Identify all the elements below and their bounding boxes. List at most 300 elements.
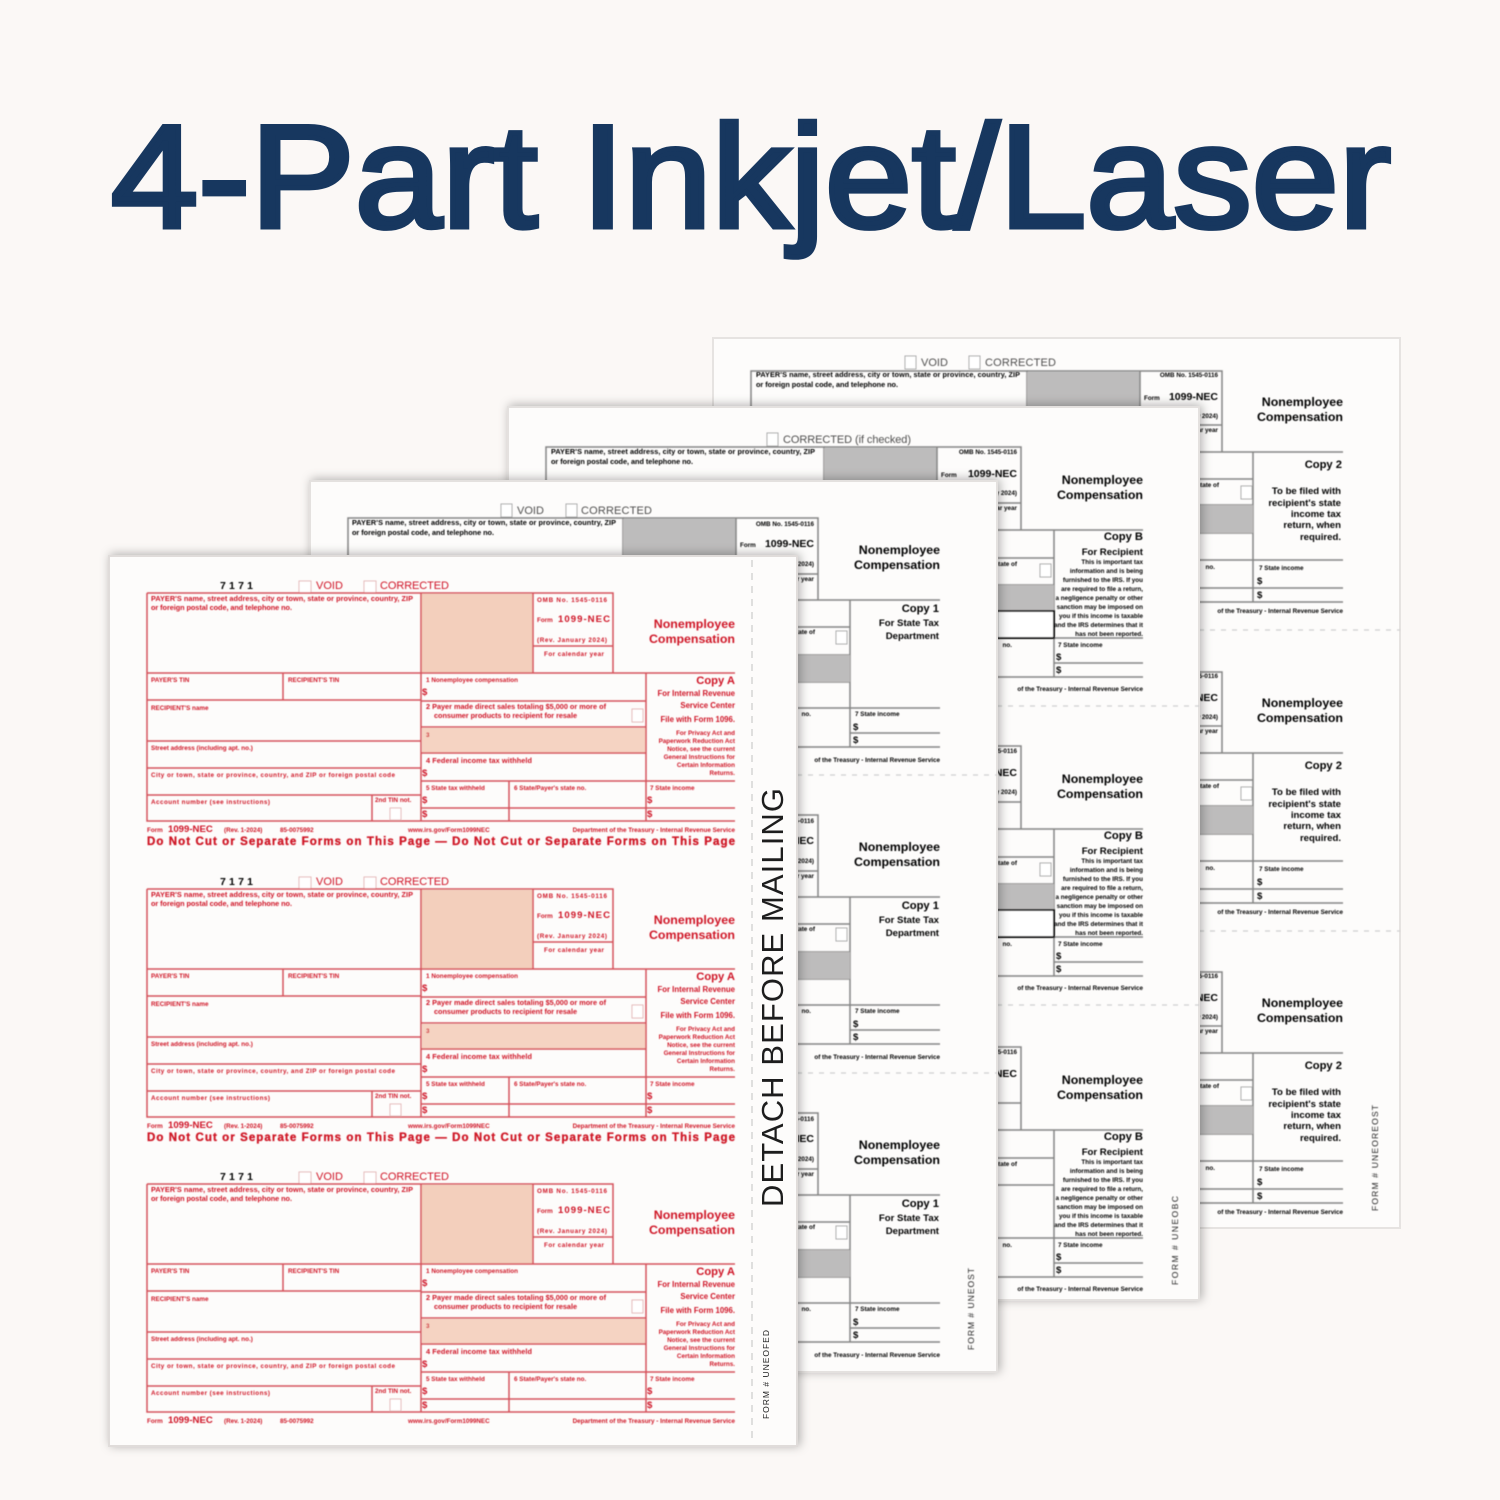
- red form 1: Notice, see the current: [667, 746, 736, 753]
- form block 1: are required to file a return,: [1061, 586, 1143, 593]
- form block 2: income tax: [1291, 810, 1342, 821]
- form block 3: state of: [793, 1224, 816, 1231]
- form block 3: Copy 2: [1305, 1060, 1342, 1072]
- form block 3: state of: [1197, 1083, 1220, 1090]
- page 2: copy 1 for state tax department: [310, 481, 997, 1372]
- form block 3: no.: [1206, 1165, 1215, 1172]
- form block 2: Compensation: [1257, 711, 1343, 725]
- red form 1: Street address (including apt. no.): [151, 745, 253, 752]
- page 2 forms: [348, 504, 997, 1359]
- form block 1: furnished to the IRS. If you: [1063, 577, 1143, 584]
- red form 1: City or town, state or province, country, and ZIP or foreign postal code: [151, 772, 395, 779]
- page 3 form code: FORM # UNEOBC: [1170, 1196, 1180, 1285]
- red form 1: 6 State/Payer's state no.: [514, 785, 586, 792]
- red form 2: 2nd TIN not.: [375, 1093, 412, 1100]
- red form 1: For Internal Revenue: [657, 689, 736, 698]
- form block 1: required.: [1300, 532, 1341, 543]
- top form header: CORRECTED: [985, 357, 1056, 369]
- form block 2: Nonemployee: [1262, 696, 1343, 710]
- red form 1: $: [422, 768, 428, 779]
- top form header: [546, 433, 937, 488]
- form block 2: 1099-NEC: [765, 835, 814, 847]
- red form 1: [147, 580, 736, 848]
- red form 2: RECIPIENT'S name: [151, 1001, 209, 1008]
- form block 3: 1099-NEC: [968, 1068, 1017, 1080]
- red form 1: General Instructions for: [664, 754, 736, 761]
- form block 1: For calendar year: [964, 505, 1018, 512]
- form block 1: $: [853, 735, 859, 746]
- form block 3: OMB No. 1545-0116: [756, 1116, 814, 1123]
- form block 2: sanction may be imposed on: [1057, 903, 1143, 910]
- form block 1: a negligence penalty or other: [1056, 595, 1144, 602]
- red form 2: File with Form 1096.: [660, 1011, 735, 1020]
- form block 2: $: [853, 1019, 859, 1030]
- red form 2: 7 State income: [650, 1081, 695, 1088]
- red form 2: 1099-NEC: [168, 1120, 213, 1131]
- top form header: PAYER'S name, street address, city or town, state or province, country, ZIP: [756, 370, 1020, 379]
- form block 1: [824, 447, 1144, 693]
- red form 1: 7171: [220, 580, 253, 592]
- form block 2: state of: [995, 860, 1018, 867]
- form block 3: [959, 1047, 1144, 1293]
- top form header: PAYER'S name, street address, city or town, state or province, country, ZIP: [352, 518, 616, 527]
- red form 2: Form: [537, 913, 553, 920]
- red form 1: File with Form 1096.: [660, 715, 735, 724]
- red form 2: 2 Payer made direct sales totaling $5,000 or more of: [426, 998, 607, 1007]
- red form 1: Do Not Cut or Separate Forms on This Page — Do Not Cut or Separate Forms on This Page: [147, 836, 735, 848]
- page 2 form code: FORM # UNEOST: [966, 1268, 976, 1350]
- red form 2: $: [647, 1105, 653, 1116]
- form block 3: 7 State income: [855, 1306, 900, 1313]
- form block 2: no.: [1206, 865, 1215, 872]
- red form 3: 2 Payer made direct sales totaling $5,000 or more of: [426, 1293, 607, 1302]
- form block 2: a negligence penalty or other: [1056, 894, 1144, 901]
- red form 1: Form: [147, 827, 163, 834]
- form block 3: Nonemployee: [1262, 996, 1343, 1010]
- red form 3: City or town, state or province, country, and ZIP or foreign postal code: [151, 1363, 395, 1370]
- red forms: [147, 580, 736, 1426]
- red form 3: 2nd TIN not.: [375, 1388, 412, 1395]
- red form 1: RECIPIENT'S TIN: [288, 677, 340, 684]
- form block 1: no.: [802, 711, 811, 718]
- red form 2: or foreign postal code, and telephone no.: [151, 899, 292, 908]
- red form 1: CORRECTED: [380, 580, 449, 592]
- red form 2: Form: [147, 1123, 163, 1130]
- red form 1: RECIPIENT'S name: [151, 705, 209, 712]
- title: 4-Part Inkjet/Laser: [111, 95, 1391, 258]
- form block 3: information and is being: [1070, 1168, 1143, 1175]
- red form 3: 6 State/Payer's state no.: [514, 1376, 586, 1383]
- form block 2: Copy B: [1104, 830, 1143, 842]
- form block 2: 7 State income: [1058, 941, 1103, 948]
- red form 3: PAYER'S name, street address, city or town, state or province, country, ZIP: [151, 1185, 413, 1194]
- red form 3: Form: [537, 1208, 553, 1215]
- form block 1: information and is being: [1070, 568, 1143, 575]
- red form 3: 4 Federal income tax withheld: [426, 1347, 532, 1356]
- form block 1: For State Tax: [879, 618, 940, 629]
- form block 2: Copy 1: [902, 900, 939, 912]
- form block 1: state of: [995, 561, 1018, 568]
- red form 1: Copy A: [696, 675, 735, 687]
- form block 2: Copy 2: [1305, 760, 1342, 772]
- red form 2: $: [422, 1105, 428, 1116]
- red form 3: 1099-NEC: [168, 1415, 213, 1426]
- red form 2: For Internal Revenue: [657, 985, 736, 994]
- form block 3: [1159, 972, 1343, 1216]
- form block 2: 7 State income: [1259, 866, 1304, 873]
- form block 1: Copy 2: [1305, 459, 1342, 471]
- form block 2: you if this income is taxable: [1059, 912, 1143, 919]
- form block 2: [1159, 672, 1343, 916]
- form block 3: $: [1257, 1177, 1263, 1188]
- red form 1: Returns.: [709, 770, 735, 777]
- red form 3: Service Center: [680, 1292, 735, 1301]
- red form 2: Street address (including apt. no.): [151, 1041, 253, 1048]
- red form 3: File with Form 1096.: [660, 1306, 735, 1315]
- form block 3: Copy 1: [902, 1198, 939, 1210]
- form block 3: Compensation: [1257, 1011, 1343, 1025]
- red form 2: 1 Nonemployee compensation: [426, 973, 518, 980]
- form block 1: Form: [1144, 395, 1160, 402]
- red form 3: Returns.: [709, 1361, 735, 1368]
- form block 1: [1027, 371, 1343, 615]
- form block 3: recipient's state: [1268, 1099, 1341, 1110]
- red form 2: RECIPIENT'S TIN: [288, 973, 340, 980]
- red form 3: [147, 1171, 736, 1426]
- red form 2: Returns.: [709, 1066, 735, 1073]
- form block 1: (Rev. January 2024): [958, 490, 1017, 497]
- red form 3: $: [422, 1278, 428, 1289]
- form block 1: Compensation: [1057, 488, 1143, 502]
- form block 2: of the Treasury - Internal Revenue Service: [1017, 985, 1143, 992]
- red form 1: Account number (see instructions): [151, 799, 270, 806]
- form block 2: of the Treasury - Internal Revenue Service: [1217, 909, 1343, 916]
- red form 2: 85-0075992: [280, 1123, 314, 1130]
- form block 2: 1099-NEC: [968, 767, 1017, 779]
- red form 1: PAYER'S TIN: [151, 677, 190, 684]
- form block 3: a negligence penalty or other: [1056, 1195, 1144, 1202]
- form block 2: 7 State income: [855, 1008, 900, 1015]
- red form 2: Do Not Cut or Separate Forms on This Page — Do Not Cut or Separate Forms on This Page: [147, 1132, 735, 1144]
- form block 2: This is important tax: [1081, 858, 1143, 865]
- form block 2: (Rev. January 2024): [958, 789, 1017, 796]
- red form 1: 3: [426, 732, 430, 739]
- red form 1: 1099-NEC: [168, 824, 213, 835]
- red form 2: City or town, state or province, country, and ZIP or foreign postal code: [151, 1068, 395, 1075]
- red form 2: Compensation: [649, 928, 735, 942]
- form block 2: has not been reported.: [1075, 930, 1143, 937]
- perforation line: [751, 560, 753, 1440]
- form block 2: (Rev. January 2024): [755, 858, 814, 865]
- form block 1: 1099-NEC: [968, 468, 1017, 480]
- red form 1: 4 Federal income tax withheld: [426, 756, 532, 765]
- form block 1: Nonemployee: [1262, 395, 1343, 409]
- form block 2: To be filed with: [1272, 787, 1341, 798]
- red form 1: (Rev. 1-2024): [224, 827, 262, 834]
- form block 1: Compensation: [1257, 410, 1343, 424]
- form block 2: furnished to the IRS. If you: [1063, 876, 1143, 883]
- red form 1: Nonemployee: [654, 617, 735, 631]
- form block 1: $: [1056, 665, 1062, 676]
- red form 2: OMB No. 1545-0116: [537, 893, 607, 900]
- form block 3: For calendar year: [762, 1171, 815, 1178]
- red form 3: Copy A: [696, 1266, 735, 1278]
- red form 1: 2 Payer made direct sales totaling $5,000 or more of: [426, 702, 607, 711]
- red form 2: CORRECTED: [380, 876, 449, 888]
- red form 1: Compensation: [649, 632, 735, 646]
- red form 1: Department of the Treasury - Internal Revenue Service: [573, 827, 735, 834]
- form block 1: Nonemployee: [859, 543, 940, 557]
- red form 2: Paperwork Reduction Act: [659, 1034, 736, 1041]
- red form 3: Department of the Treasury - Internal Revenue Service: [573, 1418, 735, 1425]
- form block 1: state of: [793, 629, 816, 636]
- red form 3: $: [647, 1386, 653, 1397]
- form block 3: you if this income is taxable: [1059, 1213, 1143, 1220]
- form block 1: (Rev. January 2024): [1159, 413, 1218, 420]
- form block 3: For Recipient: [1082, 1147, 1144, 1158]
- form block 1: Copy B: [1104, 531, 1143, 543]
- form block 1: Form: [941, 472, 957, 479]
- form block 1: $: [853, 722, 859, 733]
- form block 3: OMB No. 1545-0116: [959, 1049, 1017, 1056]
- form block 1: of the Treasury - Internal Revenue Service: [1217, 608, 1343, 615]
- form block 3: $: [1257, 1191, 1263, 1202]
- form block 1: For calendar year: [1166, 427, 1219, 434]
- red form 3: For Internal Revenue: [657, 1280, 736, 1289]
- form block 1: $: [1257, 576, 1263, 587]
- form block 2: state of: [1197, 783, 1220, 790]
- red form 3: (Rev. 1-2024): [224, 1418, 262, 1425]
- red form 2: www.irs.gov/Form1099NEC: [407, 1123, 490, 1130]
- red form 2: Department of the Treasury - Internal Revenue Service: [573, 1123, 735, 1130]
- top form header: [348, 504, 736, 559]
- form block 3: income tax: [1291, 1110, 1342, 1121]
- form block 3: furnished to the IRS. If you: [1063, 1177, 1143, 1184]
- red form 1: 1099-NEC: [558, 614, 610, 625]
- red form 3: www.irs.gov/Form1099NEC: [407, 1418, 490, 1425]
- form block 3: For calendar year: [1166, 1028, 1219, 1035]
- red form 2: Notice, see the current: [667, 1042, 736, 1049]
- red form 3: General Instructions for: [664, 1345, 736, 1352]
- form block 3: Nonemployee: [1062, 1073, 1143, 1087]
- red form 1: consumer products to recipient for resale: [434, 711, 577, 720]
- red form 3: or foreign postal code, and telephone no.: [151, 1194, 292, 1203]
- form block 3: OMB No. 1545-0116: [1160, 973, 1218, 980]
- form block 1: 7 State income: [1058, 642, 1103, 649]
- form block 2: information and is being: [1070, 867, 1143, 874]
- red form 2: 5 State tax withheld: [426, 1081, 485, 1088]
- red form 2: Account number (see instructions): [151, 1095, 270, 1102]
- top form header: VOID: [921, 357, 948, 369]
- form block 1: For calendar year: [762, 576, 815, 583]
- red form 3: Form: [147, 1418, 163, 1425]
- red form 3: 1099-NEC: [558, 1205, 610, 1216]
- form block 2: For calendar year: [1166, 728, 1219, 735]
- red form 2: (Rev. 1-2024): [224, 1123, 262, 1130]
- red form 1: Form: [537, 617, 553, 624]
- form block 3: are required to file a return,: [1061, 1186, 1143, 1193]
- form block 2: Compensation: [1057, 787, 1143, 801]
- form block 2: [755, 815, 940, 1061]
- red form 1: $: [647, 795, 653, 806]
- form block 1: 1099-NEC: [765, 538, 814, 550]
- red form 2: 4 Federal income tax withheld: [426, 1052, 532, 1061]
- form block 2: no.: [1003, 941, 1012, 948]
- form block 1: This is important tax: [1081, 559, 1143, 566]
- form block 2: [958, 746, 1144, 992]
- red form 1: 85-0075992: [280, 827, 314, 834]
- form block 1: (Rev. January 2024): [755, 561, 814, 568]
- form block 3: $: [1056, 1252, 1062, 1263]
- red form 3: 1 Nonemployee compensation: [426, 1268, 518, 1275]
- red form 2: For Privacy Act and: [676, 1026, 735, 1033]
- top form header: PAYER'S name, street address, city or town, state or province, country, ZIP: [551, 447, 815, 456]
- form block 2: no.: [802, 1008, 811, 1015]
- form block 1: you if this income is taxable: [1059, 613, 1143, 620]
- form block 2: For Recipient: [1082, 846, 1144, 857]
- page 3 forms: [546, 433, 1199, 1293]
- red form 3: OMB No. 1545-0116: [537, 1188, 607, 1195]
- red form 2: [147, 876, 736, 1144]
- red form 3: For calendar year: [544, 1242, 605, 1249]
- form block 1: Nonemployee: [1062, 473, 1143, 487]
- red form 3: For Privacy Act and: [676, 1321, 735, 1328]
- form block 2: Nonemployee: [859, 840, 940, 854]
- red form 3: VOID: [316, 1171, 343, 1183]
- form block 3: 1099-NEC: [1169, 992, 1218, 1004]
- form block 2: (Rev. January 2024): [1159, 714, 1218, 721]
- form block 1: state of: [1197, 482, 1220, 489]
- red form 1: Certain Information: [677, 762, 735, 769]
- red form 3: $: [422, 1359, 428, 1370]
- red form 2: VOID: [316, 876, 343, 888]
- red form 3: Certain Information: [677, 1353, 735, 1360]
- red form 2: Certain Information: [677, 1058, 735, 1065]
- red form 3: 3: [426, 1323, 430, 1330]
- form block 3: (Rev. January 2024): [1159, 1014, 1218, 1021]
- form block 2: OMB No. 1545-0116: [756, 818, 814, 825]
- top form header: CORRECTED (if checked): [783, 434, 911, 446]
- red form 1: 7 State income: [650, 785, 695, 792]
- top form header: [751, 356, 1140, 412]
- red form 2: $: [422, 1091, 428, 1102]
- red form 3: Notice, see the current: [667, 1337, 736, 1344]
- red form 3: 7 State income: [650, 1376, 695, 1383]
- page 3: copy B for recipient: [508, 407, 1199, 1300]
- form block 3: Nonemployee: [859, 1138, 940, 1152]
- red form 2: 3: [426, 1028, 430, 1035]
- form block 3: no.: [1003, 1242, 1012, 1249]
- form block 2: For calendar year: [762, 873, 815, 880]
- form block 2: return, when: [1283, 821, 1341, 832]
- red form 1: 5 State tax withheld: [426, 785, 485, 792]
- form block 2: Department: [886, 928, 940, 939]
- form block 2: required.: [1300, 833, 1341, 844]
- form block 3: $: [853, 1330, 859, 1341]
- top form header: VOID: [517, 505, 544, 517]
- top form header: or foreign postal code, and telephone no.: [551, 457, 693, 466]
- form block 2: $: [1257, 877, 1263, 888]
- form block 1: For Recipient: [1082, 547, 1144, 558]
- red form 1: $: [422, 687, 428, 698]
- form block 1: return, when: [1283, 520, 1341, 531]
- form block 3: This is important tax: [1081, 1159, 1143, 1166]
- red form 1: For Privacy Act and: [676, 730, 735, 737]
- form block 1: OMB No. 1545-0116: [756, 521, 814, 528]
- red form 3: Account number (see instructions): [151, 1390, 270, 1397]
- form block 2: OMB No. 1545-0116: [959, 748, 1017, 755]
- red form 3: consumer products to recipient for resale: [434, 1302, 577, 1311]
- form block 3: $: [853, 1317, 859, 1328]
- red form 3: $: [422, 1386, 428, 1397]
- form block 2: are required to file a return,: [1061, 885, 1143, 892]
- form block 2: recipient's state: [1268, 799, 1341, 810]
- red form 1: Paperwork Reduction Act: [659, 738, 736, 745]
- red form 3: PAYER'S TIN: [151, 1268, 190, 1275]
- red form 1: or foreign postal code, and telephone no.: [151, 603, 292, 612]
- red form 1: (Rev. January 2024): [537, 637, 607, 644]
- form block 3: 7 State income: [1058, 1242, 1103, 1249]
- form block 1: [623, 518, 940, 764]
- red form 2: Copy A: [696, 971, 735, 983]
- form block 2: $: [1056, 964, 1062, 975]
- form block 3: of the Treasury - Internal Revenue Service: [1017, 1286, 1143, 1293]
- form block 1: and the IRS determines that it: [1054, 622, 1144, 629]
- red form 2: (Rev. January 2024): [537, 933, 607, 940]
- form block 1: of the Treasury - Internal Revenue Service: [1017, 686, 1143, 693]
- form block 2: Nonemployee: [1062, 772, 1143, 786]
- red form 3: Street address (including apt. no.): [151, 1336, 253, 1343]
- red form 2: Service Center: [680, 997, 735, 1006]
- top form header: or foreign postal code, and telephone no.: [756, 380, 898, 389]
- red form 3: $: [422, 1400, 428, 1411]
- form block 3: 7 State income: [1259, 1166, 1304, 1173]
- form block 1: $: [1257, 590, 1263, 601]
- form block 1: $: [1056, 652, 1062, 663]
- form block 1: Form: [740, 542, 756, 549]
- red form 2: PAYER'S name, street address, city or town, state or province, country, ZIP: [151, 890, 413, 899]
- red form 1: $: [422, 795, 428, 806]
- form block 2: $: [853, 1032, 859, 1043]
- form block 3: Department: [886, 1226, 940, 1237]
- form block 1: Department: [886, 631, 940, 642]
- form block 1: income tax: [1291, 509, 1342, 520]
- form block 3: (Rev. January 2024): [755, 1156, 814, 1163]
- red form 3: RECIPIENT'S TIN: [288, 1268, 340, 1275]
- red form 1: $: [647, 809, 653, 820]
- red form 2: 7171: [220, 876, 253, 888]
- form block 3: [755, 1113, 940, 1359]
- red form 2: For calendar year: [544, 947, 605, 954]
- red form 2: Nonemployee: [654, 913, 735, 927]
- red form 1: For calendar year: [544, 651, 605, 658]
- form block 3: state of: [995, 1161, 1018, 1168]
- form block 1: To be filed with: [1272, 486, 1341, 497]
- form block 2: OMB No. 1545-0116: [1160, 673, 1218, 680]
- form block 1: has not been reported.: [1075, 631, 1143, 638]
- form block 2: and the IRS determines that it: [1054, 921, 1144, 928]
- form block 3: has not been reported.: [1075, 1231, 1143, 1238]
- form block 3: Copy B: [1104, 1131, 1143, 1143]
- form block 3: required.: [1300, 1133, 1341, 1144]
- form block 1: 7 State income: [855, 711, 900, 718]
- red form 3: (Rev. January 2024): [537, 1228, 607, 1235]
- form block 3: 1099-NEC: [765, 1133, 814, 1145]
- page 1 form code: FORM # UNEOFED: [761, 1330, 771, 1419]
- red form 1: $: [422, 809, 428, 820]
- form block 1: sanction may be imposed on: [1057, 604, 1143, 611]
- form block 1: no.: [1206, 564, 1215, 571]
